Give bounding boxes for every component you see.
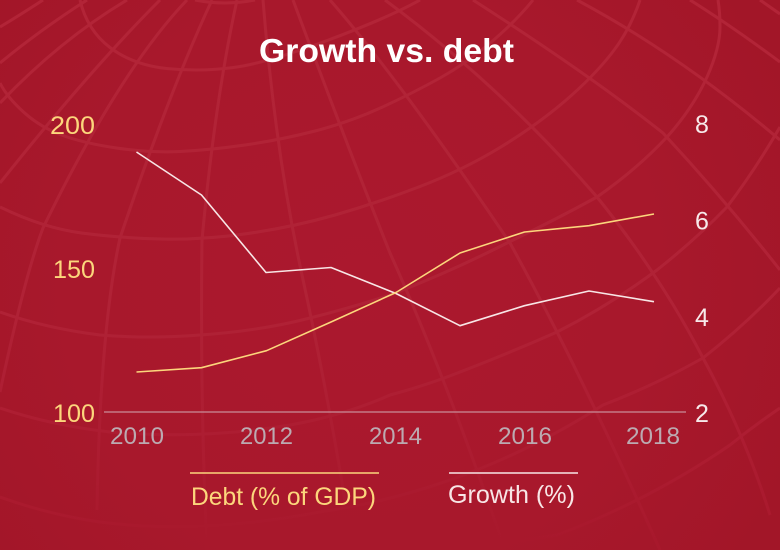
left axis labels: debt: 200 (50, 112, 95, 140)
legend: debt: Debt (% of GDP) (191, 483, 376, 511)
legend: growth: Growth (%) (448, 481, 575, 509)
right axis labels: growth: 2 (695, 400, 709, 428)
right axis labels: growth: 4 (695, 304, 709, 332)
x axis line (104, 411, 686, 413)
x axis year labels: 2018 (626, 423, 680, 450)
x axis year labels: 2016 (498, 423, 552, 450)
right axis labels: growth: 8 (695, 111, 709, 139)
x axis year labels (110, 423, 680, 450)
x axis year labels: 2012 (240, 423, 293, 450)
left axis labels: debt (50, 112, 95, 428)
debt line (136, 214, 654, 372)
right axis labels: growth: 6 (695, 208, 709, 236)
left axis labels: debt: 100 (53, 400, 95, 428)
x axis year labels: 2010 (110, 423, 164, 450)
left axis labels: debt: 150 (53, 256, 95, 284)
x axis year labels: 2014 (369, 423, 422, 450)
right axis labels: growth (695, 111, 709, 428)
growth line (136, 152, 654, 326)
title: Growth vs. debt (259, 32, 514, 69)
